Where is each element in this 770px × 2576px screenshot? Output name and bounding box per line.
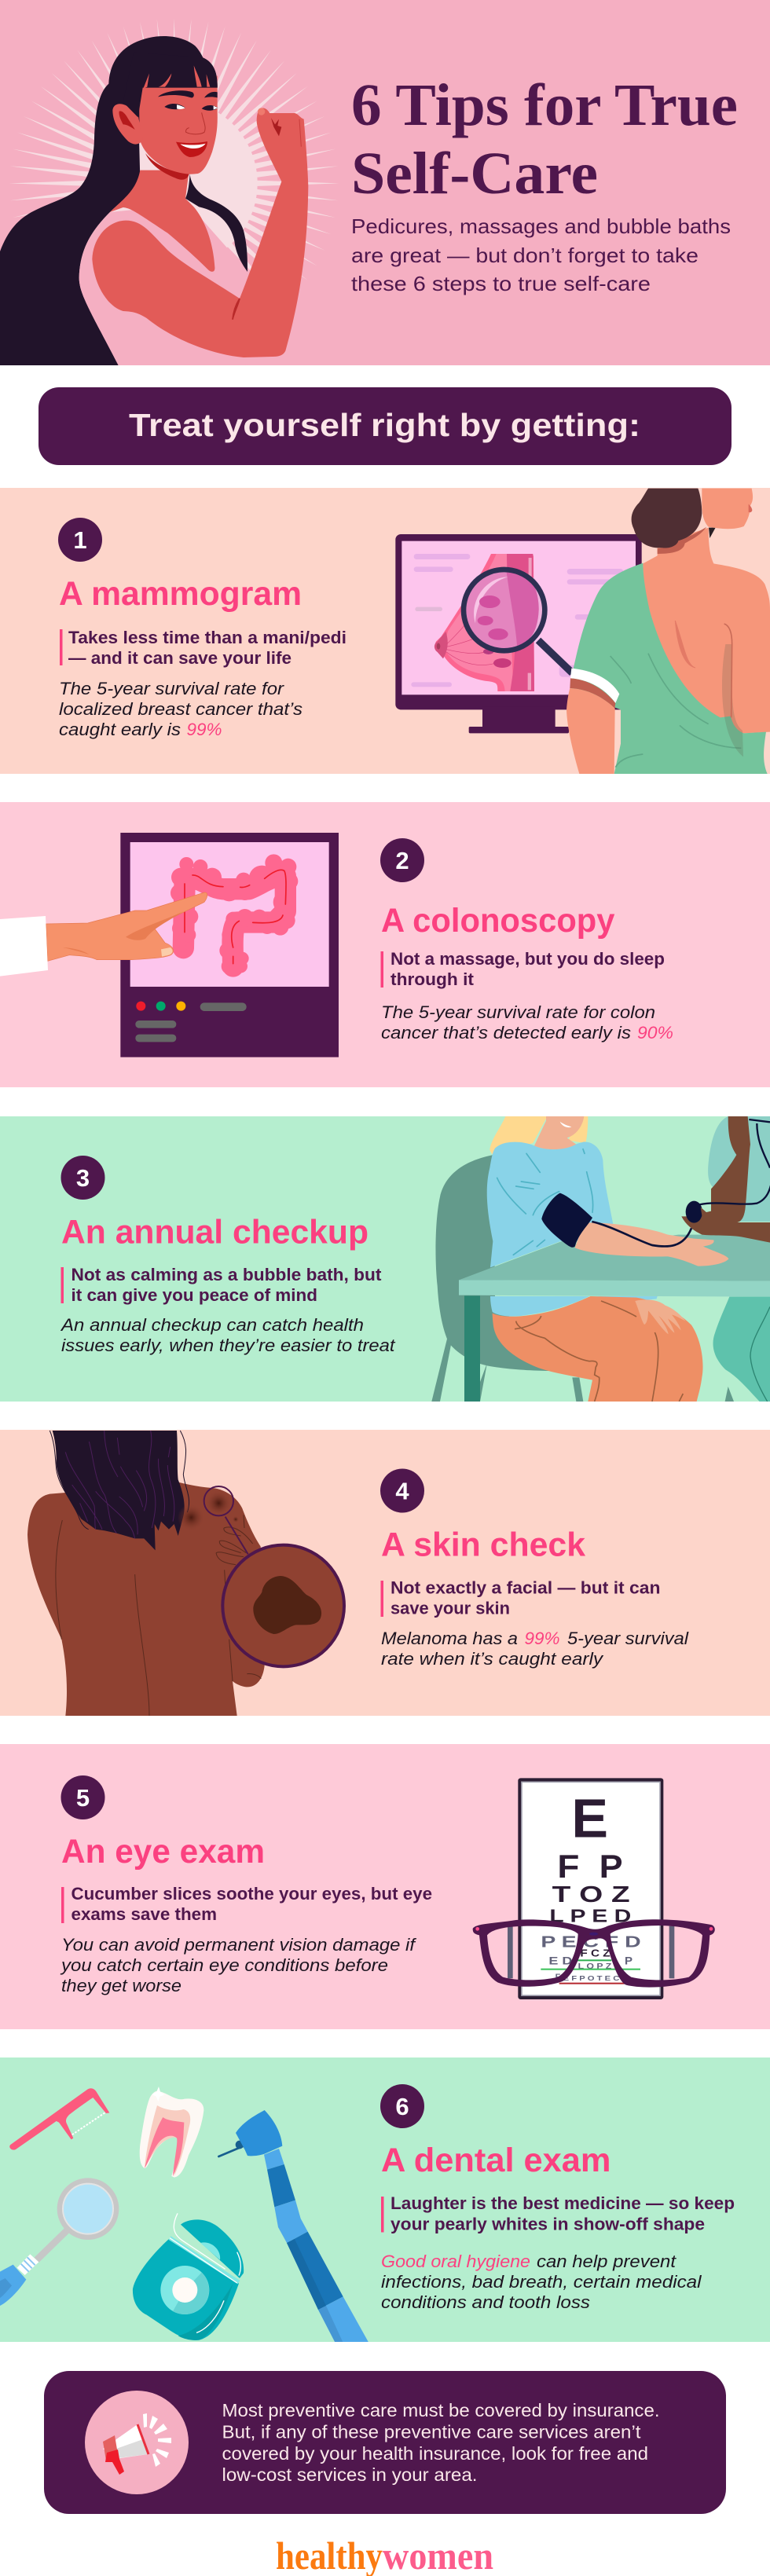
note text: low-cost services in your area. — [222, 2464, 478, 2485]
body text — [381, 2252, 702, 2312]
note text: covered by your health insurance, look for free and — [222, 2443, 648, 2464]
tagline: Not exactly a facial — but it can — [390, 1577, 660, 1598]
panel: 3 annual checkup — [0, 1116, 770, 1402]
heading: a colonoscopy: A colonoscopy — [381, 902, 615, 940]
subtitle: are great — but don’t forget to take — [351, 244, 698, 267]
tagline — [381, 2193, 735, 2234]
panel: 2 colonoscopy — [0, 802, 770, 1087]
floss container — [133, 2213, 244, 2340]
illustration: blood pressure check — [431, 1116, 770, 1402]
title: Self-Care — [351, 141, 598, 207]
body text — [60, 1315, 396, 1355]
body text — [381, 1002, 673, 1042]
note text: Most preventive care must be covered by insurance. — [222, 2400, 660, 2420]
body text: Good oral hygiene — [381, 2252, 530, 2271]
body text: An annual checkup can catch health — [60, 1315, 364, 1335]
number badge 3: 3 — [76, 1164, 90, 1192]
moles — [179, 1494, 238, 1526]
tagline: exams save them — [71, 1904, 217, 1924]
number badge 2: 2 — [395, 847, 409, 874]
illustration: back with mole and magnified view — [28, 1431, 344, 1716]
banner: treat yourself: Treat yourself right by getting: — [129, 407, 640, 443]
eye chart: E D — [548, 1955, 572, 1967]
title: 6 Tips for True — [351, 72, 738, 138]
dental drill — [218, 2110, 368, 2343]
subtitle: Pedicures, massages and bubble baths — [351, 214, 731, 238]
nurse — [681, 1116, 770, 1402]
body text: 5-year survival — [567, 1629, 689, 1648]
note text — [222, 2400, 660, 2485]
tagline: Laughter is the best medicine — so keep — [390, 2193, 735, 2213]
tooth — [140, 2087, 204, 2178]
number badge 5 — [61, 1775, 105, 1819]
eye chart: P E C F D — [541, 1933, 641, 1951]
subtitle — [351, 214, 731, 295]
body text: You can avoid permanent vision damage if — [61, 1935, 417, 1955]
dental mirror — [0, 2181, 116, 2306]
magnifier callout — [204, 1486, 344, 1666]
illustration: eye chart and glasses — [473, 1778, 715, 1999]
sleeve — [0, 916, 48, 977]
body text: conditions and tooth loss — [381, 2292, 590, 2312]
body text — [60, 1935, 417, 1995]
chair — [431, 1155, 583, 1402]
icon: megaphone — [85, 2391, 189, 2494]
tagline — [380, 1577, 660, 1618]
body text — [59, 679, 302, 739]
number badge 6 — [380, 2084, 424, 2128]
panel: 6 dental exam — [0, 2058, 770, 2343]
number badge 1 — [58, 518, 102, 562]
body text: The 5-year survival rate for — [59, 679, 285, 698]
banner: treat yourself — [38, 387, 732, 465]
glasses — [473, 1919, 715, 1988]
title — [351, 72, 738, 207]
heading: a dental exam: A dental exam — [381, 2142, 611, 2179]
number badge 4: 4 — [395, 1477, 409, 1505]
heading: an annual checkup: An annual checkup — [61, 1213, 368, 1251]
body text: 90% — [637, 1023, 673, 1042]
body text: The 5-year survival rate for colon — [381, 1002, 655, 1022]
illustration: woman flexing arm with sunburst — [0, 5, 352, 365]
illustration: monitor, magnifier and patient — [395, 489, 770, 774]
number badge 1: 1 — [73, 526, 87, 554]
tagline: your pearly whites in show-off shape — [390, 2214, 705, 2234]
hair — [50, 1431, 189, 1550]
tagline: Not a massage, but you do sleep — [390, 949, 665, 969]
number badge 2 — [380, 838, 424, 882]
body text: Melanoma has a — [381, 1629, 518, 1648]
floss pick — [9, 2088, 109, 2150]
illustration: colon on screen with pointing hand — [0, 833, 339, 1057]
eye chart: F — [557, 1848, 579, 1885]
tagline: Takes less time than a mani/pedi — [68, 628, 346, 647]
panel: insurance note — [44, 2371, 726, 2514]
eye chart: T O Z — [552, 1882, 630, 1907]
number badge 6: 6 — [395, 2093, 409, 2120]
body text: you catch certain eye conditions before — [60, 1955, 388, 1975]
body text: 99% — [525, 1629, 559, 1648]
seated patient — [487, 1116, 703, 1402]
eye chart: E F P O T E C — [563, 1974, 620, 1982]
panel: 5 eye exam — [0, 1744, 770, 2029]
eye chart: P — [625, 1955, 632, 1967]
panel: 1 mammogram — [0, 488, 770, 774]
tagline: save your skin — [390, 1598, 510, 1618]
tagline: it can give you peace of mind — [71, 1285, 317, 1305]
back — [28, 1482, 265, 1716]
number badge 3 — [61, 1156, 105, 1200]
monitor — [395, 534, 642, 733]
number badge 4 — [380, 1469, 424, 1513]
body text — [381, 1629, 689, 1669]
illustration: dental tools — [0, 2087, 368, 2343]
screen device — [120, 833, 339, 1057]
tagline — [380, 949, 665, 989]
subtitle: these 6 steps to true self-care — [351, 272, 651, 295]
breast diagram — [434, 554, 534, 691]
eye chart: E — [571, 1787, 608, 1849]
body text: 99% — [187, 720, 222, 739]
arm — [575, 1222, 728, 1266]
eye chart — [508, 1778, 674, 1999]
body text: can help prevent — [537, 2252, 677, 2271]
tagline: through it — [390, 969, 475, 989]
panel: hero — [0, 0, 770, 365]
body text: they get worse — [61, 1976, 182, 1995]
table — [459, 1235, 770, 1402]
body text: rate when it’s caught early — [381, 1649, 604, 1669]
tagline — [60, 628, 346, 668]
tagline: Cucumber slices soothe your eyes, but eye — [71, 1884, 432, 1904]
tagline: — and it can save your life — [68, 648, 292, 668]
heading: a skin check: A skin check — [381, 1526, 585, 1563]
note text: But, if any of these preventive care services aren’t — [222, 2421, 641, 2442]
panel: 4 skin check — [0, 1430, 770, 1716]
magnifier — [464, 570, 572, 673]
hand — [46, 892, 207, 961]
patient — [566, 489, 770, 774]
tagline — [61, 1265, 382, 1305]
logo: healthywomen — [276, 2534, 493, 2576]
eye chart: L P E D — [549, 1906, 631, 1926]
eye chart: L O P Z — [578, 1962, 611, 1971]
tagline — [61, 1884, 432, 1924]
body text: infections, bad breath, certain medical — [381, 2272, 702, 2292]
number badge 5: 5 — [76, 1784, 90, 1812]
body text: localized breast cancer that’s — [59, 699, 302, 719]
body text: cancer that’s detected early is — [381, 1023, 631, 1042]
colon — [170, 854, 298, 974]
eye chart: F C Z — [580, 1948, 610, 1959]
blood pressure cuff and tube — [541, 1119, 770, 1248]
eye chart: P — [600, 1848, 623, 1885]
body text: caught early is — [59, 720, 181, 739]
heading: an eye exam: An eye exam — [61, 1833, 265, 1871]
tagline: Not as calming as a bubble bath, but — [71, 1265, 382, 1284]
eye chart: F — [556, 1973, 560, 1981]
body text: issues early, when they’re easier to treat — [61, 1336, 396, 1355]
heading: a mammogram: A mammogram — [59, 575, 302, 613]
